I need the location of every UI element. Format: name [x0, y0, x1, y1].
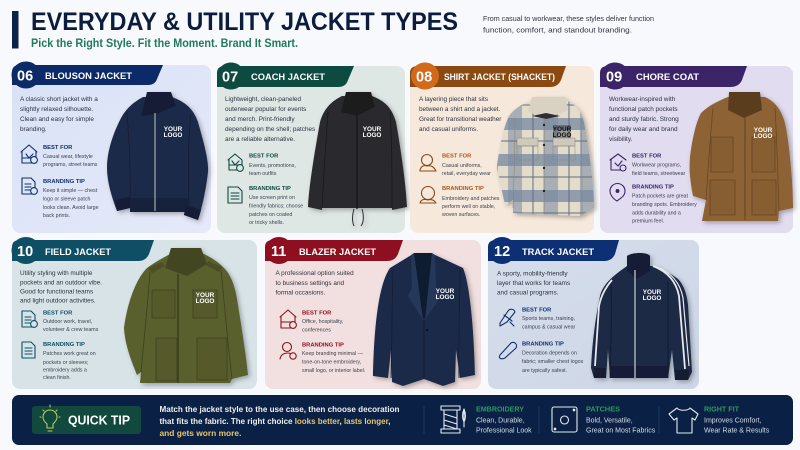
best for: retail, everyday wear — [442, 171, 491, 177]
best for — [249, 154, 296, 177]
branding tip: BRANDING TIP — [442, 186, 484, 192]
header banner — [12, 237, 154, 264]
icon: branding tip — [420, 186, 436, 203]
best for: team outfits — [249, 171, 277, 177]
description: slightly relaxed silhouette. — [20, 106, 93, 113]
branding tip: Decoration depends on — [522, 350, 577, 356]
best for: BEST FOR — [302, 310, 332, 316]
branding tip — [43, 342, 96, 381]
panel: 12 track jacket — [488, 237, 699, 389]
description: and merch. Print-friendly — [225, 116, 295, 123]
description: Workwear-inspired with — [609, 96, 676, 103]
description: formal occasions. — [276, 290, 325, 296]
card background — [600, 66, 793, 233]
best for — [43, 310, 99, 333]
icon: branding tip — [22, 342, 35, 358]
branding tip: small logo, or interior label. — [302, 368, 365, 374]
icon: branding tip — [499, 342, 517, 359]
embroidery: Clean, Durable, — [476, 418, 525, 424]
description: A classic short jacket with a — [20, 96, 98, 103]
description: and sturdy fabric. Strong — [609, 116, 679, 123]
best for — [442, 154, 491, 177]
card background — [12, 240, 257, 389]
panel: 08 shirt jacket — [410, 62, 594, 233]
description: A sporty, mobility-friendly — [497, 270, 568, 278]
branding tip: BRANDING TIP — [632, 184, 674, 190]
card background — [265, 240, 481, 389]
branding tip: fabric; smaller chest logos — [522, 359, 584, 365]
description: functional patch pockets — [609, 106, 678, 113]
panel: quick tip footer — [12, 395, 793, 445]
embroidery: Professional Look — [476, 428, 532, 434]
branding tip: logo or sleeve patch — [43, 196, 90, 202]
best for: BEST FOR — [43, 310, 73, 316]
jacket illustration: LOGO — [553, 132, 571, 139]
patches: Great on Most Fabrics — [586, 428, 656, 434]
quick tip badge — [32, 405, 141, 434]
header banner: SHIRT JACKET (SHACKET) — [444, 72, 555, 83]
header banner: 11 — [271, 244, 286, 260]
header banner: CHORE COAT — [636, 72, 699, 83]
branding tip: embroidery adds a — [43, 368, 87, 374]
jacket illustration: YOUR — [164, 126, 183, 133]
header banner: COACH JACKET — [251, 72, 325, 83]
jacket illustration — [107, 92, 208, 220]
branding tip: BRANDING TIP — [249, 186, 291, 192]
branding tip: Patch pockets are great — [632, 194, 688, 200]
jacket illustration: YOUR — [196, 292, 215, 299]
jacket illustration: YOUR — [553, 126, 572, 133]
jacket illustration: LOGO — [363, 132, 381, 139]
icon: t-shirt — [669, 408, 698, 433]
jacket illustration — [124, 248, 248, 383]
best for: campus & casual wear — [522, 324, 576, 330]
branding tip: pockets or sleeves; — [43, 360, 88, 366]
icon: branding tip — [228, 187, 242, 203]
header banner — [12, 62, 163, 88]
description: Great for transitional weather — [419, 116, 502, 123]
best for: Workwear programs, — [632, 162, 681, 168]
jacket illustration: YOUR — [643, 289, 662, 296]
tip text: that fits the fabric. The right choice looks better, lasts longer, — [160, 416, 391, 426]
icon: branding tip — [280, 342, 296, 359]
card background — [217, 66, 405, 233]
embroidery: EMBROIDERY — [476, 404, 524, 414]
icon: best for — [22, 311, 37, 327]
header banner — [217, 62, 354, 90]
header banner: 08 — [416, 70, 432, 86]
branding tip: tone-on-tone embroidery, — [302, 360, 361, 366]
right fit: RIGHT FIT — [704, 404, 740, 414]
header banner: 12 — [494, 244, 510, 260]
header banner — [488, 237, 619, 264]
best for: volunteer & crew teams — [43, 327, 99, 333]
right fit — [704, 404, 770, 434]
branding tip — [442, 186, 500, 218]
branding tip: adds durability and a — [632, 210, 681, 216]
jacket illustration: LOGO — [196, 298, 214, 305]
branding tip — [522, 342, 584, 374]
branding tip: BRANDING TIP — [43, 342, 85, 348]
right fit: Improves Comfort, — [704, 418, 762, 424]
branding tip: BRANDING TIP — [302, 342, 344, 348]
jacket illustration — [308, 92, 407, 226]
tip text: and gets worn more. — [160, 428, 241, 438]
best for — [43, 145, 98, 168]
branding tip: back prints. — [43, 213, 70, 219]
best for: programs, street teams — [43, 162, 98, 168]
branding tip — [302, 342, 365, 374]
description: for daily wear and brand — [609, 126, 678, 133]
best for: BEST FOR — [522, 308, 552, 314]
best for: BEST FOR — [43, 145, 73, 151]
intro text: From casual to workwear, these styles deliver function — [483, 14, 654, 23]
quick tip badge: QUICK TIP — [68, 414, 130, 428]
description: outerwear popular for events — [225, 106, 306, 113]
best for: field teams, streetwear — [632, 171, 686, 177]
jacket illustration: YOUR — [754, 127, 773, 134]
best for: Sports teams, training, — [522, 316, 575, 322]
branding tip: looks clean. Avoid large — [43, 205, 99, 211]
header banner: FIELD JACKET — [45, 247, 111, 258]
best for: BEST FOR — [632, 154, 662, 160]
description: A professional option suited — [276, 270, 354, 277]
card background — [12, 65, 211, 233]
description: between a shirt and a jacket. — [419, 106, 501, 113]
branding tip: or tricky shells. — [249, 220, 284, 226]
best for: Outdoor work, travel, — [43, 319, 92, 325]
patches: PATCHES — [586, 404, 620, 414]
best for: Casual wear, lifestyle — [43, 154, 93, 160]
description: and casual programs. — [497, 290, 559, 296]
description: Lightweight, clean-paneled — [225, 96, 301, 103]
panel: 06 blouson jacket — [12, 62, 211, 233]
branding tip: are typically safest. — [522, 368, 567, 374]
branding tip: clean finish. — [43, 375, 71, 381]
divider — [424, 406, 659, 434]
icon: best for — [420, 154, 436, 171]
jacket illustration: LOGO — [754, 133, 772, 140]
branding tip: BRANDING TIP — [522, 342, 564, 348]
icon: patch — [552, 407, 577, 432]
description: branding. — [20, 126, 47, 133]
best for — [522, 308, 576, 330]
intro text: function, comfort, and standout branding. — [483, 26, 632, 34]
icon: best for — [228, 154, 243, 171]
panel: 09 chore coat — [600, 62, 793, 233]
panel: 10 field jacket — [12, 237, 257, 389]
best for — [632, 154, 686, 177]
header banner: 07 — [222, 70, 238, 86]
icon: best for — [500, 309, 515, 326]
right fit: Wear Rate & Results — [704, 428, 770, 434]
header banner: 09 — [606, 70, 622, 86]
branding tip — [249, 186, 303, 226]
branding tip: Keep branding minimal — — [302, 351, 364, 357]
best for — [302, 310, 343, 334]
description: Clean and easy for simple — [20, 116, 94, 123]
best for: Casual uniforms, — [442, 163, 482, 169]
description: visibility. — [609, 136, 633, 143]
description: and casual uniforms. — [419, 126, 478, 133]
subtitle: Pick the Right Style. Fit the Moment. Brand It Smart. — [31, 37, 298, 50]
branding tip — [632, 184, 697, 224]
branding tip — [43, 179, 99, 219]
header banner: TRACK JACKET — [522, 247, 594, 258]
icon: branding tip — [22, 178, 37, 194]
description: Utility styling with multiple — [20, 270, 93, 277]
best for: BEST FOR — [249, 154, 279, 160]
header banner — [600, 62, 747, 90]
branding tip: Use screen print on — [249, 195, 295, 201]
branding tip: patches on coated — [249, 212, 292, 218]
branding tip: premium feel. — [632, 218, 664, 224]
description: A layering piece that sits — [419, 96, 488, 103]
title: EVERYDAY & UTILITY JACKET TYPES — [31, 8, 458, 36]
patches: Bold, Versatile, — [586, 418, 633, 424]
jacket illustration: LOGO — [436, 294, 454, 301]
jacket illustration: LOGO — [164, 132, 182, 139]
description: pockets and an outdoor vibe. — [20, 280, 102, 286]
description: depending on the shell; patches — [225, 126, 315, 133]
header accent bar — [12, 11, 18, 48]
jacket illustration: LOGO — [643, 295, 661, 302]
patches — [586, 404, 656, 434]
footer background — [12, 395, 793, 445]
description: to business settings and — [276, 280, 345, 287]
card background — [488, 240, 699, 389]
header banner: 10 — [17, 244, 33, 260]
description: Good for functional teams — [20, 288, 93, 296]
branding tip: friendly fabrics; choose — [249, 204, 303, 210]
branding tip: Embroidery and patches — [442, 196, 500, 202]
header banner — [265, 237, 403, 264]
best for: Office, hospitality, — [302, 319, 343, 325]
description: and light outdoor activities. — [20, 298, 96, 304]
best for: conferences — [302, 328, 331, 334]
icon: best for — [21, 145, 37, 163]
jacket illustration — [373, 253, 475, 386]
branding tip: Patches work great on — [43, 351, 96, 357]
panel: 07 coach jacket — [217, 62, 407, 233]
icon: branding tip — [610, 184, 625, 201]
best for: Events, promotions, — [249, 163, 296, 169]
branding tip: BRANDING TIP — [43, 179, 85, 185]
header banner: BLAZER JACKET — [299, 247, 376, 258]
jacket illustration — [591, 253, 692, 380]
description: are a reliable alternative. — [225, 136, 295, 143]
icon: lightbulb — [40, 405, 60, 431]
card background — [410, 66, 594, 233]
jacket illustration — [497, 97, 594, 216]
jacket illustration: YOUR — [436, 288, 455, 295]
tip text: Match the jacket style to the use case, then choose decoration — [160, 404, 400, 414]
branding tip: woven surfaces. — [442, 212, 480, 218]
branding tip: Keep it simple — chest — [43, 188, 98, 194]
jacket illustration: YOUR — [363, 126, 382, 133]
icon: best for — [610, 154, 626, 171]
embroidery — [476, 404, 532, 434]
best for: BEST FOR — [442, 154, 472, 160]
header banner: BLOUSON JACKET — [45, 71, 132, 82]
description: layer that works for teams — [497, 280, 570, 287]
header banner: 06 — [17, 68, 33, 84]
branding tip: perform well on stable, — [442, 204, 495, 210]
header banner — [410, 62, 566, 90]
icon: best for — [280, 310, 296, 328]
branding tip: branding spots. Embroidery — [632, 202, 697, 208]
jacket illustration — [690, 92, 793, 221]
panel: 11 blazer jacket — [265, 237, 481, 389]
icon: thread spool — [441, 406, 466, 433]
